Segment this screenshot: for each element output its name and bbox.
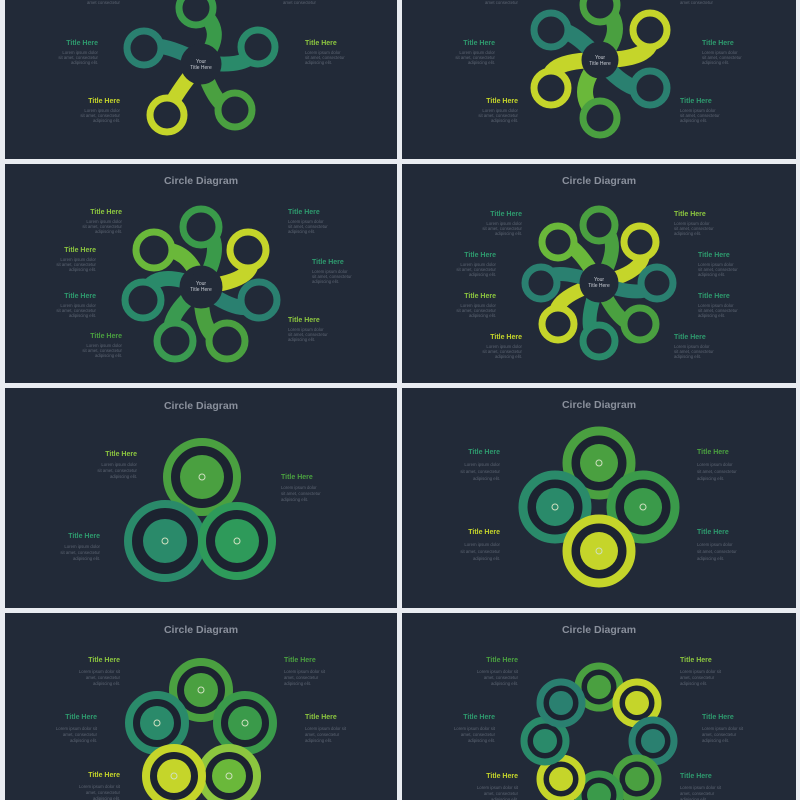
labels: Lorem ipsum dolor xyxy=(86,343,122,348)
labels: adipiscing elit. xyxy=(495,354,522,359)
labels: Lorem ipsum dolor xyxy=(698,262,734,267)
labels: amet, consectetur xyxy=(680,675,715,680)
labels: Lorem ipsum dolor xyxy=(486,221,522,226)
labels: adipiscing elit. xyxy=(697,476,724,481)
labels: adipiscing elit. xyxy=(281,497,308,502)
labels: adipiscing elit. xyxy=(468,738,495,743)
labels: sit amet, consectetur xyxy=(288,224,328,229)
labels: adipiscing elit. xyxy=(95,229,122,234)
swirl bands xyxy=(143,227,259,341)
labels: sit amet, consectetur xyxy=(460,549,501,554)
labels: sit amet, consectetur xyxy=(674,349,714,354)
center label: Your xyxy=(196,281,206,287)
swirl circles xyxy=(525,209,673,357)
labels: Lorem ipsum dolor xyxy=(698,303,734,308)
labels: adipiscing elit. xyxy=(70,738,97,743)
labels: Title Here xyxy=(88,98,120,105)
labels: Lorem ipsum dolor sit xyxy=(680,785,721,790)
labels: Title Here xyxy=(468,449,500,456)
labels: sit amet, consectetur xyxy=(56,308,97,313)
labels: amet, consectetur xyxy=(86,675,121,680)
labels: Title Here xyxy=(64,247,96,254)
labels: amet, consectetur xyxy=(86,790,121,795)
labels: amet consectetur xyxy=(680,0,714,5)
labels: adipiscing elit. xyxy=(288,337,315,342)
labels: sit amet, consectetur xyxy=(56,262,97,267)
swirl circles xyxy=(125,209,277,359)
center label: Title Here xyxy=(190,65,212,71)
labels: amet consectetur xyxy=(283,0,317,5)
swirl circles xyxy=(127,0,275,132)
labels: Lorem ipsum dolor xyxy=(464,542,500,547)
labels: adipiscing elit. xyxy=(93,681,120,686)
labels: Lorem ipsum dolor sit xyxy=(477,669,518,674)
swirl bands xyxy=(144,8,258,115)
labels: Title Here xyxy=(486,657,518,664)
labels: adipiscing elit. xyxy=(95,353,122,358)
labels: Lorem ipsum dolor xyxy=(281,485,317,490)
heading: Circle Diagram xyxy=(562,175,636,187)
center label: Your xyxy=(595,55,605,61)
labels: Title Here xyxy=(88,657,120,664)
labels: adipiscing elit. xyxy=(491,118,518,123)
labels: Lorem ipsum dolor sit xyxy=(79,784,120,789)
labels: adipiscing elit. xyxy=(69,313,96,318)
labels: Title Here xyxy=(68,533,100,540)
inner filled circles xyxy=(533,675,665,800)
labels: Lorem ipsum dolor xyxy=(64,544,100,549)
labels: adipiscing elit. xyxy=(288,229,315,234)
labels: amet, consectetur xyxy=(305,732,340,737)
labels: Lorem ipsum dolor xyxy=(312,269,348,274)
labels: Title Here xyxy=(66,40,98,47)
labels: Lorem ipsum dolor sit xyxy=(680,669,721,674)
labels: sit amet, consectetur xyxy=(305,55,345,60)
labels: Lorem ipsum dolor xyxy=(459,50,495,55)
labels: Title Here xyxy=(64,293,96,300)
labels: Title Here xyxy=(697,529,729,536)
labels: sit amet, consectetur xyxy=(97,468,138,473)
labels xyxy=(454,657,744,800)
labels: sit amet, consectetur xyxy=(288,332,328,337)
labels: adipiscing elit. xyxy=(702,60,729,65)
labels: Lorem ipsum dolor xyxy=(464,462,500,467)
swirl circles xyxy=(534,0,667,135)
slide 5: three ring diagram xyxy=(60,400,321,578)
labels: adipiscing elit. xyxy=(469,313,496,318)
labels: sit amet, consectetur xyxy=(456,267,497,272)
swirl bands xyxy=(549,5,651,118)
labels: sit amet, consectetur xyxy=(697,469,737,474)
labels: adipiscing elit. xyxy=(674,354,701,359)
labels: Lorem ipsum dolor xyxy=(486,344,522,349)
labels: sit amet, consectetur xyxy=(58,55,99,60)
labels: Title Here xyxy=(463,714,495,721)
heading: Circle Diagram xyxy=(164,624,238,636)
labels: sit amet, consectetur xyxy=(82,348,123,353)
labels: amet, consectetur xyxy=(702,732,737,737)
labels: Lorem ipsum dolor xyxy=(460,303,496,308)
labels: Title Here xyxy=(702,40,734,47)
labels: Lorem ipsum dolor xyxy=(697,542,733,547)
labels: Lorem ipsum dolor sit xyxy=(284,669,325,674)
labels: Title Here xyxy=(468,529,500,536)
slide 7: five ring diagram xyxy=(56,624,347,800)
labels: sit amet, consectetur xyxy=(482,226,523,231)
labels: Title Here xyxy=(90,333,122,340)
labels: Title Here xyxy=(88,772,120,779)
labels: Title Here xyxy=(674,211,706,218)
labels: Lorem ipsum dolor xyxy=(460,262,496,267)
labels: adipiscing elit. xyxy=(698,272,725,277)
labels xyxy=(456,211,738,359)
labels: Title Here xyxy=(284,657,316,664)
labels: Title Here xyxy=(105,451,137,458)
labels xyxy=(58,0,345,123)
labels xyxy=(60,451,321,561)
labels: amet consectetur xyxy=(87,0,121,5)
labels: Lorem ipsum dolor sit xyxy=(702,726,743,731)
labels: adipiscing elit. xyxy=(473,556,500,561)
inner filled circles xyxy=(143,455,259,563)
labels: Title Here xyxy=(486,98,518,105)
labels: adipiscing elit. xyxy=(69,267,96,272)
labels: Lorem ipsum dolor xyxy=(60,257,96,262)
labels: sit amet, consectetur xyxy=(698,267,738,272)
labels: Title Here xyxy=(698,252,730,259)
heading: Circle Diagram xyxy=(562,624,636,636)
slide 1: five-petal swirl xyxy=(58,0,345,132)
labels: Title Here xyxy=(281,474,313,481)
labels: Title Here xyxy=(463,40,495,47)
labels: Title Here xyxy=(90,209,122,216)
labels: adipiscing elit. xyxy=(93,118,120,123)
labels: adipiscing elit. xyxy=(473,476,500,481)
labels: adipiscing elit. xyxy=(469,272,496,277)
labels: Title Here xyxy=(698,293,730,300)
labels: Title Here xyxy=(680,657,712,664)
labels: Title Here xyxy=(288,209,320,216)
labels: amet consectetur xyxy=(485,0,519,5)
outer rings xyxy=(523,431,675,583)
labels: sit amet, consectetur xyxy=(478,113,519,118)
labels: Lorem ipsum dolor xyxy=(702,50,738,55)
labels: sit amet, consectetur xyxy=(702,55,742,60)
labels: adipiscing elit. xyxy=(71,60,98,65)
labels: adipiscing elit. xyxy=(697,556,724,561)
slide 2: six-petal swirl xyxy=(455,0,742,135)
labels xyxy=(460,449,737,561)
labels: adipiscing elit. xyxy=(312,279,339,284)
labels: amet, consectetur xyxy=(680,791,715,796)
labels: adipiscing elit. xyxy=(284,681,311,686)
labels: Title Here xyxy=(305,714,337,721)
labels: adipiscing elit. xyxy=(305,60,332,65)
labels: Lorem ipsum dolor xyxy=(680,108,716,113)
swirl bands xyxy=(541,225,657,341)
outer rings xyxy=(129,662,273,800)
labels: adipiscing elit. xyxy=(680,118,707,123)
labels: Lorem ipsum dolor xyxy=(62,50,98,55)
outer rings xyxy=(128,442,272,578)
labels: Title Here xyxy=(288,317,320,324)
labels: Title Here xyxy=(486,773,518,780)
labels: Lorem ipsum dolor sit xyxy=(477,785,518,790)
labels: sit amet, consectetur xyxy=(680,113,720,118)
slide 3: seven swirl circle diagram xyxy=(56,175,352,359)
labels: Title Here xyxy=(674,334,706,341)
labels: Lorem ipsum dolor sit xyxy=(79,669,120,674)
heading: Circle Diagram xyxy=(562,399,636,411)
labels: sit amet, consectetur xyxy=(456,308,497,313)
labels: Title Here xyxy=(464,252,496,259)
labels: Lorem ipsum dolor xyxy=(60,303,96,308)
center label: Title Here xyxy=(589,61,611,67)
center label: Title Here xyxy=(190,287,212,293)
labels: Title Here xyxy=(312,259,344,266)
labels: Title Here xyxy=(305,40,337,47)
labels: sit amet, consectetur xyxy=(312,274,352,279)
labels: Title Here xyxy=(680,773,712,780)
labels: amet, consectetur xyxy=(461,732,496,737)
center label: Title Here xyxy=(588,283,610,289)
labels: sit amet, consectetur xyxy=(482,349,523,354)
labels xyxy=(455,0,742,123)
slide 6: four ring diagram xyxy=(460,399,737,583)
labels: Title Here xyxy=(65,714,97,721)
labels: Title Here xyxy=(697,449,729,456)
labels: adipiscing elit. xyxy=(468,60,495,65)
heading: Circle Diagram xyxy=(164,175,238,187)
labels: sit amet, consectetur xyxy=(82,224,123,229)
labels: Lorem ipsum dolor sit xyxy=(454,726,495,731)
heading: Circle Diagram xyxy=(164,400,238,412)
labels: adipiscing elit. xyxy=(702,738,729,743)
labels xyxy=(56,209,352,358)
labels: Lorem ipsum dolor xyxy=(101,462,137,467)
labels: Lorem ipsum dolor xyxy=(86,219,122,224)
inner filled circles xyxy=(140,673,262,793)
labels: Title Here xyxy=(702,714,734,721)
labels: Title Here xyxy=(680,98,712,105)
labels: Lorem ipsum dolor xyxy=(697,462,733,467)
inner filled circles xyxy=(536,444,662,570)
labels: Lorem ipsum dolor xyxy=(482,108,518,113)
slide 8: eight ring diagram xyxy=(454,624,744,800)
labels: Lorem ipsum dolor xyxy=(288,327,324,332)
labels: adipiscing elit. xyxy=(491,681,518,686)
labels: Lorem ipsum dolor sit xyxy=(56,726,97,731)
labels: amet, consectetur xyxy=(63,732,98,737)
labels: adipiscing elit. xyxy=(680,681,707,686)
outer rings xyxy=(524,666,674,800)
labels: sit amet, consectetur xyxy=(460,469,501,474)
labels: adipiscing elit. xyxy=(73,556,100,561)
labels: Title Here xyxy=(490,211,522,218)
labels: adipiscing elit. xyxy=(698,313,725,318)
labels: sit amet, consectetur xyxy=(281,491,321,496)
labels: sit amet, consectetur xyxy=(698,308,738,313)
labels: sit amet, consectetur xyxy=(697,549,737,554)
labels: Lorem ipsum dolor xyxy=(288,219,324,224)
labels: Lorem ipsum dolor sit xyxy=(305,726,346,731)
labels: Title Here xyxy=(490,334,522,341)
labels: adipiscing elit. xyxy=(674,231,701,236)
slide 4: eight swirl circle diagram xyxy=(456,175,738,359)
labels: Lorem ipsum dolor xyxy=(84,108,120,113)
labels: sit amet, consectetur xyxy=(60,550,101,555)
labels: Lorem ipsum dolor xyxy=(674,344,710,349)
labels: Lorem ipsum dolor xyxy=(674,221,710,226)
labels: adipiscing elit. xyxy=(305,738,332,743)
labels: sit amet, consectetur xyxy=(674,226,714,231)
labels: amet, consectetur xyxy=(484,675,519,680)
labels: adipiscing elit. xyxy=(110,474,137,479)
labels: sit amet, consectetur xyxy=(455,55,496,60)
labels: amet, consectetur xyxy=(484,791,519,796)
labels: amet, consectetur xyxy=(284,675,319,680)
labels: adipiscing elit. xyxy=(495,231,522,236)
labels: Lorem ipsum dolor xyxy=(305,50,341,55)
labels xyxy=(56,657,347,800)
center label: Your xyxy=(196,59,206,65)
labels: sit amet, consectetur xyxy=(80,113,121,118)
center label: Your xyxy=(594,277,604,283)
labels: Title Here xyxy=(464,293,496,300)
